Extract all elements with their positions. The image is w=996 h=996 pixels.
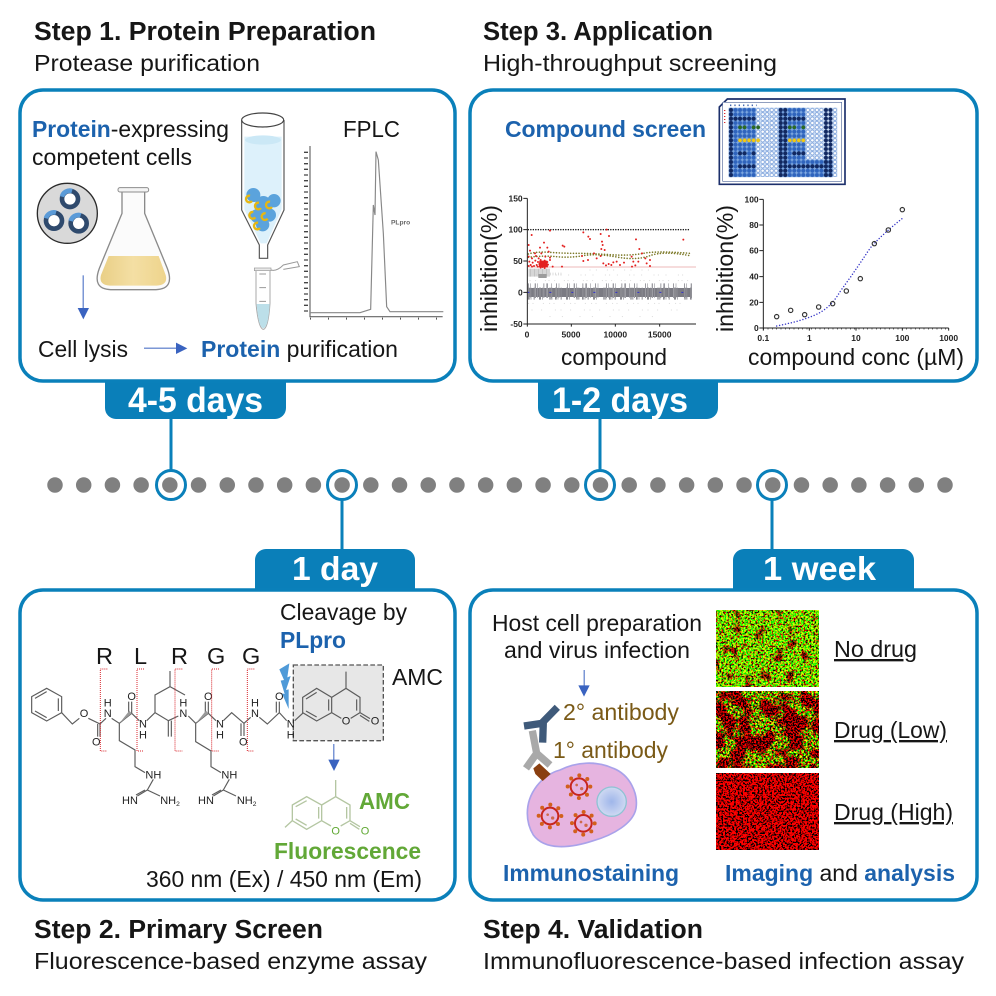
illustrations: application	[509, 99, 958, 343]
axis tick labels: 10000	[604, 330, 627, 340]
icon: culture flask	[97, 188, 170, 290]
molecule: AMC coumarin	[303, 672, 380, 728]
label: drug high: Drug (High)	[834, 799, 953, 825]
molecule: fluorescent AMC: O	[361, 825, 370, 837]
timeline connector: 1 week	[758, 470, 786, 549]
axis tick labels: -50	[510, 319, 523, 329]
heading: step 2: Step 2. Primary Screen	[34, 916, 323, 944]
label: secondary antibody: 2° antibody	[563, 699, 679, 725]
text: excitation and emission wavelengths: 360 nm (Ex) / 450 nm (Em)	[146, 866, 422, 892]
molecule: peptide substrate: 2	[176, 801, 180, 808]
axis label: inhibition left chart: inhibition(%)	[476, 205, 502, 332]
timeline connector: 1-2 days	[586, 419, 614, 500]
axis tick labels: 20	[749, 297, 759, 307]
molecule: peptide substrate: NH	[221, 769, 237, 781]
molecule: peptide substrate: O	[92, 736, 101, 748]
heading: step 2: Fluorescence-based enzyme assay	[34, 948, 428, 974]
text: cleavage by PLpro: PLpro	[280, 627, 346, 653]
arrow: down to cell lysis	[78, 275, 89, 319]
icon: well plate heat map	[719, 99, 845, 184]
axis tick labels	[745, 194, 958, 343]
axis tick labels: 100	[509, 225, 523, 235]
microscopy image: low drug	[716, 691, 819, 768]
label: peptide residues: G	[242, 643, 260, 669]
axis tick labels: 5000	[562, 330, 581, 340]
label: peptide residues: G	[207, 643, 225, 669]
label: imaging and analysis: Imaging and analysis	[725, 860, 955, 886]
axis tick labels: 0	[754, 323, 759, 333]
text: protein purification: Protein purification	[201, 336, 398, 362]
duration tab: 1 week	[733, 549, 914, 592]
AMC cleavage box	[293, 665, 383, 741]
icon: cleavage lightning	[279, 663, 291, 709]
duration tab: 1 week: 1 week	[763, 550, 877, 587]
molecule: peptide substrate: O	[80, 708, 89, 720]
icon: collection tube	[254, 262, 299, 329]
molecule: AMC coumarin: O	[342, 716, 351, 728]
axis tick labels: 0	[518, 287, 523, 297]
text: cleavage by PLpro	[280, 599, 407, 653]
duration tab: 1 day	[255, 549, 415, 592]
axis tick labels: 80	[749, 220, 759, 230]
illustrations: substrate	[32, 663, 383, 837]
molecule: peptide substrate: N	[251, 708, 259, 720]
peptide residue brackets	[100, 669, 254, 751]
label: AMC: AMC	[392, 664, 443, 690]
text: protein-expressing competent cells: competent cells	[32, 144, 192, 170]
heading: step 3: Step 3. Application	[483, 18, 713, 46]
timeline connector: 4-5 days	[156, 419, 186, 500]
molecule: peptide substrate: HN	[122, 795, 138, 807]
molecule: peptide substrate: H	[251, 697, 259, 709]
illustrations: immunostaining	[524, 670, 636, 847]
text: host cell preparation: Host cell preparation	[492, 610, 702, 636]
scatter: sample band around zero	[527, 288, 697, 297]
axis tick labels: 40	[749, 272, 759, 282]
arrow: AMC release	[328, 744, 340, 771]
molecule: peptide substrate: H	[216, 729, 224, 741]
text: host cell preparation: and virus infection	[504, 637, 690, 663]
axis tick labels: 60	[749, 246, 759, 256]
axis tick labels: 150	[509, 193, 523, 203]
label: FPLC: FPLC	[343, 116, 400, 142]
molecule: peptide substrate: O	[204, 691, 213, 703]
axis tick labels	[509, 193, 672, 340]
molecule: peptide substrate: N	[179, 708, 187, 720]
label: peptide residues: L	[134, 643, 147, 669]
scatter: reference compound	[528, 252, 690, 259]
microscopy image: no drug	[716, 610, 819, 687]
axis label: inhibition right chart: inhibition(%)	[712, 205, 738, 332]
molecule: peptide substrate: N	[287, 719, 295, 731]
label: fluorescence: Fluorescence	[274, 838, 421, 864]
molecule: peptide substrate: H	[104, 697, 112, 709]
text: protein-expressing competent cells	[32, 116, 229, 170]
molecule: peptide substrate: NH	[145, 769, 161, 781]
molecule: peptide substrate: 2	[253, 801, 257, 808]
molecule: peptide substrate: NH	[237, 795, 253, 807]
icon: virus particles	[539, 775, 595, 835]
scatter: faint background compounds	[529, 270, 690, 317]
molecule: peptide substrate: H	[139, 729, 147, 741]
axis tick labels: 50	[513, 256, 523, 266]
molecule: peptide substrate: H	[179, 697, 187, 709]
scatter: dense hits cluster	[539, 261, 548, 267]
arrow: lysis to purification	[144, 343, 187, 354]
chart: FPLC chromatogram	[306, 146, 443, 319]
heading: step 4: Immunofluorescence-based infection assay	[483, 948, 965, 974]
molecule: peptide substrate: O	[275, 691, 284, 703]
data points	[774, 207, 904, 319]
molecule: fluorescent AMC: O	[331, 825, 340, 837]
icon: secondary antibody	[524, 707, 557, 743]
axis label: compound: compound	[561, 344, 667, 370]
label: primary antibody: 1° antibody	[553, 737, 668, 763]
label: drug low: Drug (Low)	[834, 717, 947, 743]
icon: primary antibody	[526, 731, 550, 768]
label: peptide residues: R	[171, 643, 188, 669]
timeline dots	[55, 477, 946, 493]
label: peptide residues: R	[96, 643, 113, 669]
icon: chromatography column	[242, 113, 284, 258]
heading: step 4: Step 4. Validation	[483, 916, 703, 944]
fitted curve	[777, 218, 902, 326]
axis tick labels: 1000	[939, 333, 958, 343]
heading: step 2	[34, 916, 428, 974]
text: cleavage by PLpro: Cleavage by	[280, 599, 407, 625]
molecule: peptide substrate	[32, 671, 303, 808]
chart: dose response curve	[745, 194, 958, 343]
molecule: peptide substrate: NH	[160, 795, 176, 807]
duration tab: 1 day: 1 day	[292, 550, 379, 587]
timeline	[55, 419, 946, 549]
molecule: peptide substrate: N	[139, 719, 147, 731]
axis tick labels: 100	[895, 333, 910, 343]
heading: step 3: High-throughput screening	[483, 50, 777, 76]
axis tick labels: 0.1	[757, 333, 770, 343]
duration tab: 1-2 days: 1-2 days	[552, 381, 688, 420]
chart: primary screen scatter	[509, 193, 697, 340]
molecule: peptide substrate: H	[287, 729, 295, 741]
panel: validation assay	[470, 590, 977, 900]
scatter: inactive cluster	[529, 273, 562, 276]
text: protein-expressing competent cells: Protein-expressing	[32, 116, 229, 142]
panel: protein preparation	[20, 90, 455, 381]
label: immunostaining: Immunostaining	[503, 860, 679, 886]
molecule: peptide substrate: HN	[198, 795, 214, 807]
scatter: hits	[529, 230, 683, 268]
text: cell lysis: Cell lysis	[38, 336, 128, 362]
molecule: peptide substrate: O	[127, 691, 136, 703]
molecule: peptide substrate: N	[216, 719, 224, 731]
axis tick labels: 10	[851, 333, 861, 343]
panel: primary screen assay	[20, 590, 455, 900]
heading: step 1	[34, 18, 376, 76]
molecule: peptide substrate: O	[239, 736, 248, 748]
chart axes	[523, 198, 696, 327]
text: host cell preparation	[492, 610, 702, 663]
icon: infected cell	[527, 763, 636, 847]
duration tab: 4-5 days: 4-5 days	[128, 381, 263, 420]
icon: antigen	[533, 763, 551, 781]
microscopy image: high drug	[716, 773, 819, 850]
text: compound screen: Compound screen	[505, 116, 706, 142]
panel: application screen	[470, 90, 977, 381]
axis tick labels: 15000	[648, 330, 672, 340]
molecule: AMC coumarin: O	[371, 716, 380, 728]
threshold line	[528, 266, 696, 268]
axis tick labels: 0	[525, 330, 530, 340]
label: green AMC: AMC	[359, 788, 410, 814]
molecule: peptide substrate: N	[104, 708, 112, 720]
arrow: infection to staining	[578, 670, 590, 697]
chart: FPLC chromatogram: PLpro	[391, 219, 410, 226]
timeline connector: 1 day	[328, 470, 356, 549]
heading: step 3	[483, 18, 777, 76]
axis tick labels: 100	[745, 194, 759, 204]
axis tick labels: 1	[807, 333, 812, 343]
heading: step 1: Protease purification	[34, 50, 260, 76]
label: peptide residues	[96, 643, 260, 669]
heading: step 4	[483, 916, 965, 974]
molecule: fluorescent AMC	[285, 780, 370, 837]
axis label: compound concentration: compound conc (µM)	[748, 344, 964, 370]
heading: step 1: Step 1. Protein Preparation	[34, 18, 376, 46]
label: no drug: No drug	[834, 636, 917, 662]
illustrations: protein preparation	[37, 113, 443, 354]
icon: petri dish with plasmids	[37, 183, 97, 243]
scatter: positive controls	[528, 227, 690, 232]
